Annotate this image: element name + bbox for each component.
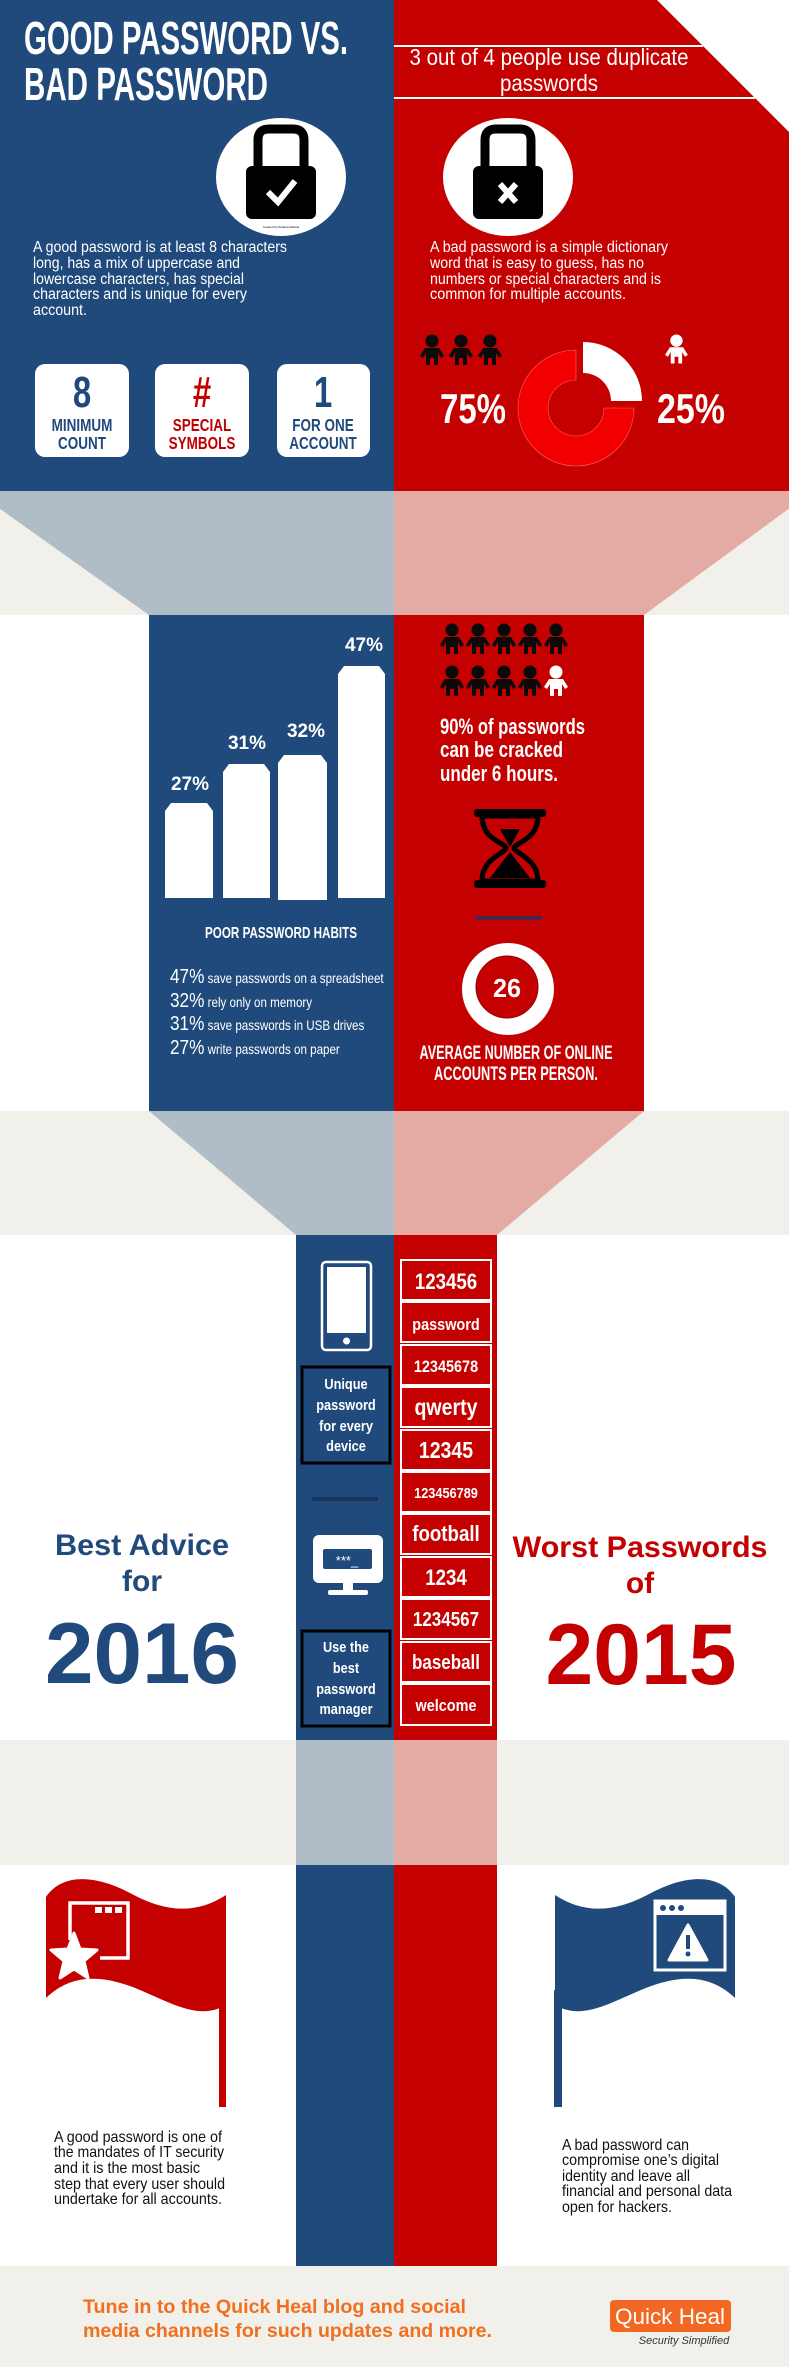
box: 8 minimum count: 8 <box>73 369 91 417</box>
heading: best advice for 2016: 2016 <box>45 1606 239 1702</box>
text: good password mandate: and it is the most basic <box>54 2160 200 2177</box>
bar chart: 32% <box>287 721 325 742</box>
heading: 3 out of 4 <box>410 44 688 96</box>
list: habits <box>170 965 384 1058</box>
box: 8 minimum count: COUNT <box>58 434 106 454</box>
text: bad password consequence: identity and leave all <box>562 2168 690 2185</box>
text: 90% cracked: under 6 hours. <box>440 761 558 786</box>
box: 8 minimum count <box>35 364 129 457</box>
text: 75%: 75% <box>440 385 506 432</box>
panel: worst passwords list: 1234567 <box>413 1608 479 1630</box>
text: footer call to action <box>83 2297 492 2342</box>
box: special symbols: SYMBOLS <box>169 434 235 454</box>
icon: red flag <box>46 1879 226 2107</box>
text: 90% cracked: can be cracked <box>440 737 563 762</box>
heading: best advice for 2016 <box>45 1529 239 1702</box>
heading: 3 out of 4: 3 out of 4 people use duplicate <box>410 44 688 70</box>
text: bad password consequence: A bad password can <box>562 2137 689 2154</box>
panel: worst passwords list: baseball <box>412 1651 480 1673</box>
bar chart: 47% <box>345 635 383 656</box>
title: GOOD PASSWORD VS. <box>24 12 348 64</box>
panel: worst passwords list: football <box>412 1523 480 1546</box>
box: 1 for one account: FOR ONE <box>292 416 354 436</box>
heading: 3 out of 4: passwords <box>500 70 598 96</box>
box: unique password: device <box>326 1437 366 1454</box>
box: password manager: Use the <box>323 1638 369 1655</box>
box: 1 for one account <box>277 364 370 457</box>
logo: Quick Heal <box>610 2300 731 2347</box>
box: unique password: Unique <box>324 1375 368 1392</box>
box: special symbols <box>155 364 249 457</box>
center columns lower <box>296 1865 497 2266</box>
box: special symbols: # <box>193 369 211 417</box>
logo: Quick Heal: Security Simplified <box>639 2335 730 2347</box>
box: password manager <box>302 1631 390 1726</box>
text: 25%: 25% <box>657 385 725 432</box>
icon: phone <box>322 1262 371 1350</box>
title: BAD PASSWORD <box>24 58 268 110</box>
icon: 26 circle: 26 <box>493 973 521 1003</box>
heading: worst passwords of 2015: of <box>626 1567 655 1600</box>
box: special symbols: SPECIAL <box>173 416 231 436</box>
heading: best advice for 2016: Best Advice <box>55 1529 229 1562</box>
panel: worst passwords list: qwerty <box>415 1395 478 1420</box>
text: good password definition <box>33 239 287 319</box>
text: good password mandate: step that every user should <box>54 2176 225 2193</box>
text: good password mandate: the mandates of IT security <box>54 2144 224 2161</box>
text: average accounts <box>420 1043 612 1085</box>
panel: cracking stats <box>394 615 644 1111</box>
box: 8 minimum count: MINIMUM <box>52 416 112 436</box>
list: habits: 47% save passwords on a spreadsheet <box>170 965 384 987</box>
heading: best advice for 2016: for <box>122 1565 162 1598</box>
text: footer call to action: media channels for such updates and more. <box>83 2321 492 2342</box>
panel: worst passwords list: 123456789 <box>414 1484 478 1501</box>
text: good password definition: account. <box>33 302 87 319</box>
icon: monitor: ***_ <box>336 1553 359 1568</box>
text: bad password definition <box>429 239 668 303</box>
text: bad password definition: numbers or special characters and is <box>430 271 661 288</box>
text: bad password consequence: open for hackers. <box>562 2199 672 2216</box>
panel: worst passwords list: password <box>412 1316 480 1334</box>
box: 1 for one account: 1 <box>314 369 332 417</box>
bar chart <box>165 635 385 900</box>
panel: best advice column <box>296 1235 394 1740</box>
panel: good password header <box>0 0 394 491</box>
box: password manager: manager <box>319 1700 373 1717</box>
text: bad password consequence: financial and personal data <box>562 2183 732 2200</box>
text: bad password consequence: compromise one’s digital <box>562 2152 719 2169</box>
icon: hourglass <box>474 809 546 888</box>
panel: worst passwords list: 12345 <box>419 1438 473 1463</box>
text: footer call to action: Tune in to the Quick Heal blog and social <box>83 2297 466 2318</box>
icon: monitor <box>313 1535 383 1595</box>
text: average accounts: AVERAGE NUMBER OF ONLINE <box>420 1043 612 1064</box>
panel: worst passwords list <box>394 1235 497 1740</box>
text: good password definition: lowercase characters, has special <box>33 271 244 288</box>
panel: worst passwords list: 1234 <box>425 1567 467 1590</box>
text: good password definition: characters and is unique for every <box>33 286 247 303</box>
bar chart: 27% <box>171 774 209 795</box>
footer <box>0 2266 789 2367</box>
panel: worst passwords list: 12345678 <box>414 1358 478 1376</box>
text: average accounts: ACCOUNTS PER PERSON. <box>434 1064 598 1085</box>
icon: ten people <box>440 624 568 696</box>
heading: poor password habits: POOR PASSWORD HABITS <box>205 925 357 942</box>
text: bad password definition: word that is easy to guess, has no <box>429 255 644 272</box>
box: password manager: password <box>316 1680 376 1697</box>
icon: bad lock <box>443 118 573 236</box>
box: unique password: password <box>316 1396 376 1413</box>
heading: worst passwords of 2015: 2015 <box>546 1607 736 1703</box>
text: good password definition: long, has a mix of uppercase and <box>33 255 240 272</box>
logo: Quick Heal: Quick Heal <box>615 2304 725 2329</box>
text: bad password consequence <box>562 2137 732 2216</box>
heading: worst passwords of 2015 <box>512 1531 768 1703</box>
heading: worst passwords of 2015: Worst Passwords <box>512 1531 768 1564</box>
panel: poor password habits <box>149 615 394 1111</box>
box: password manager: best <box>333 1659 359 1676</box>
list: habits: 31% save passwords in USB drives <box>170 1012 364 1034</box>
text: good password mandate <box>54 2129 225 2208</box>
text: 90% cracked <box>440 714 585 786</box>
icon: good lock <box>216 118 346 236</box>
box: 1 for one account: ACCOUNT <box>289 434 357 454</box>
panel: worst passwords list: welcome <box>415 1697 477 1715</box>
funnel band 1 <box>0 491 789 615</box>
text: good password mandate: A good password is one of <box>54 2129 222 2146</box>
text: 90% cracked: 90% of passwords <box>440 714 585 739</box>
title <box>24 12 348 110</box>
bar chart: 31% <box>228 733 266 754</box>
icon: one person <box>665 334 688 363</box>
chart: donut 75/25 <box>518 342 642 466</box>
text: bad password definition: common for multiple accounts. <box>430 286 626 303</box>
box: unique password: for every <box>319 1417 373 1434</box>
panel: bad password header <box>394 0 789 491</box>
text: good password mandate: undertake for all accounts. <box>54 2191 222 2208</box>
funnel band 2 <box>0 1111 789 1235</box>
icon: blue flag <box>554 1879 735 2107</box>
icon: 26 circle <box>462 943 554 1035</box>
icon: three people <box>420 334 502 365</box>
list: habits: 27% write passwords on paper <box>170 1036 340 1058</box>
icon: good lock: Created by Adriana Medina <box>263 225 300 229</box>
text: good password definition: A good password is at least 8 characters <box>33 239 287 256</box>
text: bad password definition: A bad password is a simple dictionary <box>430 239 668 256</box>
band 3 <box>0 1740 789 1865</box>
box: unique password <box>302 1367 390 1463</box>
panel: worst passwords list: 123456 <box>415 1271 477 1294</box>
list: habits: 32% rely only on memory <box>170 989 313 1011</box>
